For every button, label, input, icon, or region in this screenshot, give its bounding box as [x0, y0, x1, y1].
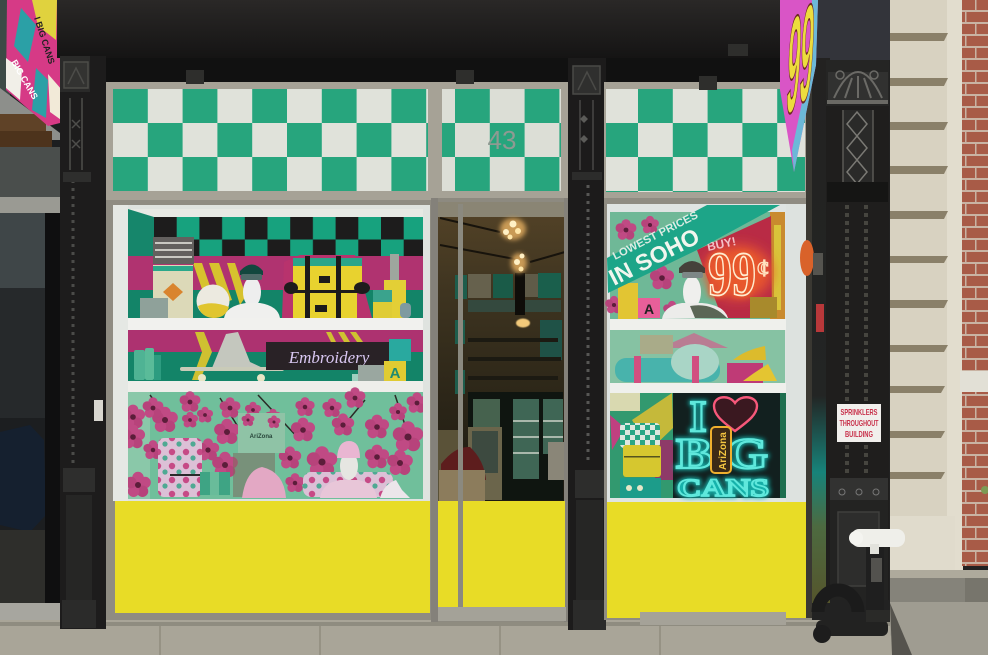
products on shelf	[618, 283, 777, 319]
left yellow panel	[115, 501, 430, 613]
ornamental capital	[64, 62, 88, 88]
centre transom checkerboard	[442, 89, 561, 191]
mannequin with pink cap	[320, 441, 377, 498]
teal lowest prices banner: IN SOHO	[604, 223, 704, 290]
teal and A boxes: A	[390, 365, 401, 382]
yellow stands and bottle	[373, 254, 411, 318]
products on shelf: A	[644, 301, 654, 317]
neon can: AriZona	[718, 432, 729, 470]
floral sofa	[303, 472, 393, 497]
sprinklers sign: THROUGHOUT	[840, 418, 879, 428]
shelf board	[610, 319, 786, 330]
drink fridges	[468, 392, 563, 500]
left transom frame	[106, 82, 437, 202]
neon 99 cents: ¢	[757, 256, 769, 282]
grey header section at right	[815, 0, 890, 60]
neon glow: B G	[676, 431, 768, 478]
door threshold	[438, 607, 566, 621]
lattice panel	[843, 110, 873, 184]
middle shelf backdrop	[128, 330, 423, 382]
left pillar	[60, 56, 106, 629]
parked car reflection	[0, 425, 46, 532]
ceiling beams	[440, 218, 565, 262]
window inner side	[113, 205, 128, 501]
building header	[57, 0, 817, 58]
neon I love big cans sign	[673, 392, 786, 502]
sprinklers sign	[837, 404, 881, 442]
teal lowest prices banner: LOWEST PRICES	[611, 209, 700, 263]
cans	[200, 472, 230, 495]
patterned wall	[610, 393, 673, 498]
neon heart	[714, 397, 757, 431]
sneaker on skateboard	[180, 332, 284, 382]
red neon panel	[697, 216, 772, 318]
reflected checks	[455, 273, 562, 394]
red notice	[816, 304, 824, 332]
hanging lights	[500, 218, 530, 328]
neon glow	[676, 392, 769, 502]
floral sneaker	[380, 480, 410, 498]
centre pillar	[568, 58, 606, 630]
top shelf backdrop	[128, 209, 423, 319]
concrete step and sidewalk	[0, 602, 988, 655]
cherry blossom wallpaper	[121, 387, 427, 499]
framed floral box	[233, 413, 286, 498]
stone facade	[890, 0, 988, 602]
black pipes	[818, 590, 858, 612]
embroidery neon sign	[266, 342, 389, 370]
orange alarm bell	[800, 240, 823, 276]
yellow backpack	[620, 423, 661, 498]
right pillar	[806, 58, 889, 618]
standpipe hydrant	[813, 529, 905, 643]
neon I: I	[689, 392, 707, 441]
threshold plate	[640, 612, 786, 625]
brick wall	[960, 0, 988, 566]
embroidery neon sign: Embroidery	[288, 348, 370, 367]
hanging patterned banner at left	[6, 0, 64, 126]
left transom checkerboard	[113, 89, 428, 191]
top shelf board	[128, 318, 423, 330]
teal lowest prices banner	[604, 205, 780, 293]
right yellow panel	[607, 502, 806, 618]
neon CANS: CANS	[677, 475, 769, 502]
hanging patterned banner at left: BIG CANS	[9, 58, 40, 101]
middle shelf display	[610, 330, 785, 383]
neon glow: I	[689, 392, 707, 441]
teal and A boxes	[352, 339, 411, 382]
yellow backpack	[282, 255, 372, 318]
green cans	[134, 348, 161, 380]
top shelf backdrop with blossoms	[605, 212, 785, 319]
cashier and counter	[438, 430, 565, 501]
stacked can box	[140, 237, 194, 318]
roller shutter	[0, 147, 60, 199]
door yellow panels	[438, 501, 565, 607]
lintel band	[100, 58, 815, 84]
sprinklers sign: SPRINKLERS	[840, 407, 878, 417]
white hydrant head	[851, 529, 905, 547]
right transom checkerboard	[606, 89, 805, 192]
neon BIG: B G	[676, 431, 768, 478]
mannequin with cap	[224, 264, 280, 318]
street number: 43	[488, 125, 516, 155]
centre transom frame	[434, 82, 570, 202]
sprinklers sign: BUILDING	[845, 429, 873, 439]
middle shelf board	[128, 381, 423, 392]
awning	[0, 88, 60, 140]
red neon panel: BUY!	[706, 234, 737, 254]
floral backpack	[158, 438, 202, 497]
right transom frame	[604, 82, 814, 202]
neon glow: CANS	[677, 475, 769, 502]
right display window	[604, 198, 812, 620]
neon 99 cents: 99	[708, 241, 756, 309]
left display window	[106, 200, 437, 620]
neighbouring storefront at left	[0, 0, 64, 622]
hanging patterned banner at left: I BIG CANS	[32, 16, 57, 65]
mannequin	[662, 261, 728, 319]
ceiling lamps	[186, 44, 748, 90]
fan capital	[826, 60, 889, 106]
neon 99 cents: 99	[708, 241, 756, 309]
shelf board	[610, 383, 786, 393]
window right bay	[786, 204, 806, 502]
door frame and handle	[431, 198, 438, 622]
glass door	[431, 198, 570, 622]
framed floral box: AriZona	[250, 434, 273, 440]
beach ball	[196, 284, 230, 318]
